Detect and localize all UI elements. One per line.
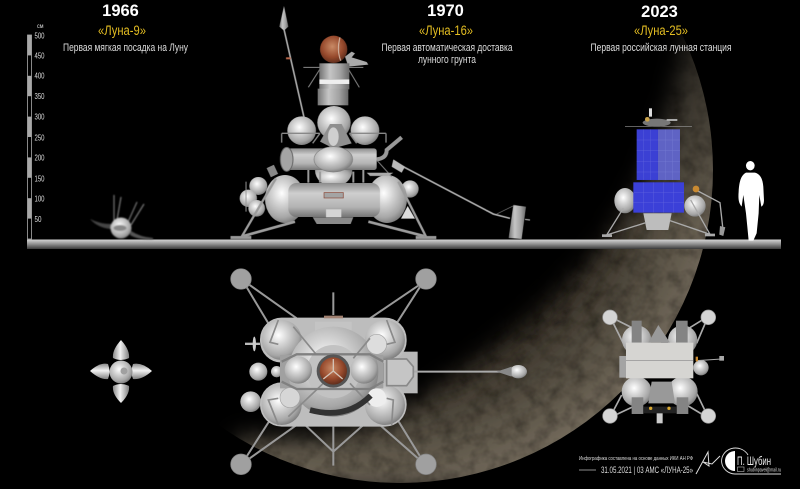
sample arm <box>383 352 527 393</box>
side spheres <box>240 337 282 412</box>
heading: Luna-9: Первая мягкая посадка на Луну <box>63 42 188 54</box>
heading: Luna-16: лунного грунта <box>418 54 477 66</box>
tank spheres <box>282 106 386 148</box>
tanks <box>614 188 706 230</box>
antenna <box>279 6 304 117</box>
author logo: shubinpavel@mail.ru <box>747 468 781 474</box>
mid cylinder <box>280 137 402 172</box>
body tanks <box>260 316 407 427</box>
Luna-9 side view <box>90 195 153 240</box>
heading: Luna-16 <box>382 2 513 66</box>
lower solar panel <box>633 182 684 213</box>
struts to main tank <box>308 170 363 183</box>
legs <box>602 200 715 237</box>
human silhouette <box>738 161 764 241</box>
lower main tank <box>265 165 407 224</box>
signature <box>696 452 720 474</box>
footer credits: 31.05.2021 | 03 АМС «ЛУНА-25» <box>601 465 693 475</box>
sample arm and drill <box>367 159 530 239</box>
author logo: П. Шубин <box>737 454 771 468</box>
heading: Luna-16: «Луна-16» <box>419 23 473 38</box>
upper instruments <box>625 108 692 127</box>
height scale: 350 <box>34 92 45 101</box>
Luna-16 side view <box>231 6 530 239</box>
folded boom <box>310 396 371 413</box>
height scale: 450 <box>34 52 45 60</box>
heading: Luna-25 <box>590 3 732 54</box>
return capsule <box>320 36 368 67</box>
height scale: 500 <box>34 32 45 40</box>
Luna-25 top view <box>603 310 724 423</box>
ground bar <box>27 240 781 249</box>
height scale: 50 <box>34 215 42 224</box>
Luna-9 top view <box>90 340 152 403</box>
deck unit <box>387 359 413 386</box>
pads <box>603 310 716 423</box>
scoop arm <box>696 356 724 361</box>
spheres and capsule <box>282 354 383 389</box>
equipment blocks <box>632 321 688 423</box>
height scale: 300 <box>34 112 45 122</box>
heading: Luna-9: 1966 <box>102 2 139 20</box>
heading: Luna-9 <box>63 2 188 54</box>
footer credits: Инфографика составлена на основе данных ИКИ АН РФ <box>579 456 693 462</box>
heading: Luna-9: «Луна-9» <box>98 23 146 38</box>
height scale: 400 <box>34 72 45 80</box>
heading: Luna-25: 2023 <box>641 3 678 21</box>
height scale: см <box>37 24 44 30</box>
height scale: 150 <box>34 174 45 184</box>
scoop arm <box>693 186 725 236</box>
landing legs <box>231 178 436 239</box>
struts <box>612 318 707 416</box>
heading: Luna-16: 1970 <box>427 2 464 20</box>
Luna-16 top view <box>231 269 527 475</box>
upper solar panel <box>637 129 680 180</box>
heading: Luna-25: Первая российская лунная станция <box>590 42 732 54</box>
moon crescent <box>231 30 713 483</box>
height scale: 250 <box>34 134 45 142</box>
lower half sphere <box>315 170 352 187</box>
footer credits <box>579 456 693 475</box>
height scale: 200 <box>34 154 45 162</box>
ascent stage <box>303 63 363 105</box>
corner brackets and diagonal booms <box>268 320 395 425</box>
landing pads <box>231 269 436 475</box>
heading: Luna-25: «Луна-25» <box>634 23 688 38</box>
landing struts <box>243 282 423 466</box>
heading: Luna-16: Первая автоматическая доставка <box>382 42 513 54</box>
tanks <box>622 325 709 407</box>
height scale: 100 <box>34 194 45 204</box>
solar panels from above <box>619 343 693 378</box>
author logo <box>722 448 781 474</box>
Luna-25 side view <box>602 108 764 241</box>
rear spheres <box>240 177 419 219</box>
height scale <box>28 24 45 239</box>
